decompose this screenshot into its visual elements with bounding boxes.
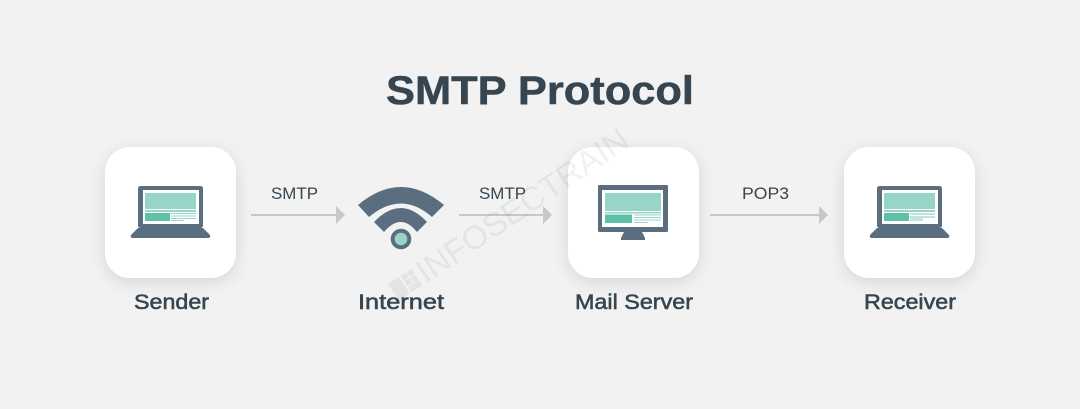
receiver card (844, 147, 975, 278)
internet label: Internet (358, 291, 444, 314)
mail server label: Mail Server (575, 291, 693, 314)
icon: monitor (598, 185, 668, 240)
panel: sender (105, 147, 236, 314)
sender card (105, 147, 236, 278)
sender label: Sender (134, 291, 209, 314)
watermark: INFOSECTRAIN (409, 120, 636, 290)
icon: sender laptop (131, 186, 210, 238)
mail server card (568, 147, 699, 278)
arrow: internet to mail server (459, 184, 552, 224)
arrow: mail server to receiver (710, 184, 828, 224)
receiver label: Receiver (864, 291, 956, 314)
icon: receiver laptop (870, 186, 949, 238)
arrow: mail server to receiver: POP3 (742, 184, 789, 203)
arrow: sender to internet (251, 184, 345, 224)
title: SMTP Protocol (386, 69, 694, 113)
icon: wifi (358, 187, 444, 249)
panel: receiver (844, 147, 975, 314)
panel: internet (358, 187, 444, 314)
arrow: internet to mail server: SMTP (479, 184, 526, 203)
arrow: sender to internet: SMTP (271, 184, 318, 203)
panel: mail server (568, 147, 699, 314)
